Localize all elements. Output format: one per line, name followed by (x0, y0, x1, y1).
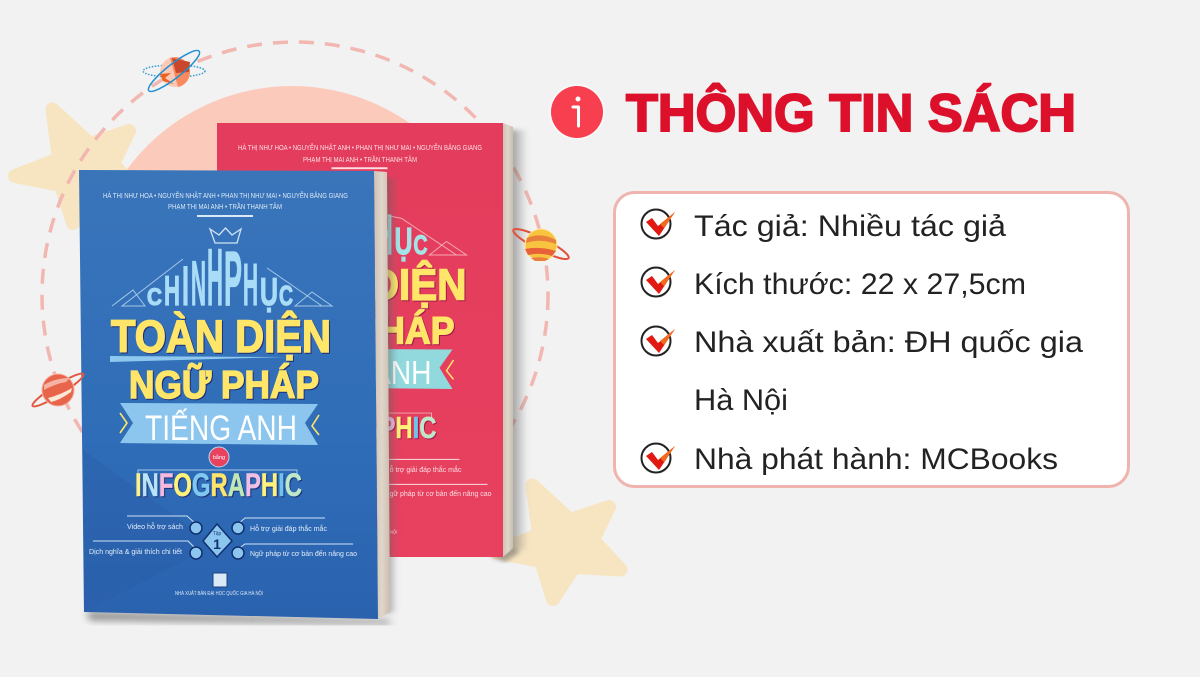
title: chinh phuc: H (207, 233, 223, 323)
row: publisher: Hà Nội (694, 384, 788, 417)
red book cover art: TIẾNG ANH (280, 353, 432, 392)
title: chinh phuc (147, 233, 293, 323)
connector (138, 470, 297, 476)
stripe (110, 356, 285, 362)
mountain outline (112, 259, 332, 306)
red book shadow (510, 130, 528, 550)
red book cover art: H (378, 204, 393, 267)
title: chinh phuc: I (182, 254, 189, 317)
blue book authors: PHẠM THỊ MAI ANH • TRẦN THANH TÂM (168, 201, 282, 211)
ribbon chevrons (120, 413, 319, 435)
title: chinh phuc: Ụ (260, 271, 278, 314)
blue book cover (79, 170, 378, 619)
red book authors (238, 143, 482, 164)
feature list: Dịch nghĩa & giải thích chi tiết (89, 547, 183, 556)
volume badge: 1 (213, 536, 221, 552)
feature list (89, 516, 357, 559)
dashed orbit (42, 42, 548, 548)
row: size: Kích thước: 22 x 27,5cm (694, 268, 1026, 301)
title: infographic: INFOGRAPHIC (135, 467, 302, 503)
row: publisher: Nhà xuất bản: ĐH quốc gia (694, 326, 1083, 359)
blue book lower shading (83, 450, 215, 612)
red book cover art: TOÀN DIỆN (244, 260, 466, 309)
feature list: Video hỗ trợ sách (127, 522, 183, 531)
icon: info (549, 84, 605, 140)
blue book ground shadow (86, 612, 392, 624)
book: red volume (217, 123, 528, 562)
volume badge (203, 524, 232, 557)
red book cover art: Ụ (394, 221, 413, 263)
icon: crown (210, 228, 241, 243)
icon: planet left (30, 370, 86, 410)
title: chinh phuc: P (224, 236, 242, 322)
book: blue volume (79, 170, 398, 624)
blue book authors (103, 191, 348, 211)
row: author: Tác giả: Nhiều tác giả (694, 210, 1006, 243)
peach circle (87, 86, 497, 496)
feature list: Ngữ pháp từ cơ bản đến nâng cao (250, 549, 357, 558)
star right (495, 486, 620, 599)
red book cover art: NGỮ PHÁP (262, 309, 454, 353)
publisher logo (213, 573, 227, 587)
bang badge: bằng (213, 454, 225, 461)
row: publisher (642, 326, 1083, 417)
heading (549, 82, 1076, 143)
title: tieng anh: TIẾNG ANH (145, 408, 297, 448)
feature list: Hỗ trợ giải đáp thắc mắc (250, 524, 327, 533)
title: chinh phuc: H (243, 252, 258, 318)
title text: THÔNG TIN SÁCH (626, 82, 1076, 143)
red book spine (503, 123, 513, 557)
publisher name: NHÀ XUẤT BẢN ĐẠI HỌC QUỐC GIA HÀ NỘI (175, 590, 263, 597)
title: toan dien: TOÀN DIỆN (111, 311, 331, 362)
red book cover art: INFOGRAPHIC (270, 411, 436, 445)
red book ground shadow (490, 548, 520, 562)
volume badge: Tập (213, 531, 222, 537)
icon: planet top (143, 46, 205, 96)
title: ngu phap: NGỮ PHÁP (129, 363, 319, 407)
bang badge (209, 447, 229, 467)
red book authors: HÀ THỊ NHƯ HOA • NGUYỄN NHẬT ANH • PHAN THỊ NHƯ MAI • NGUYỄN BĂNG GIANG (238, 143, 482, 152)
title: chinh phuc: H (164, 267, 180, 314)
red book cover art: NHÀ XUẤT BẢN ĐẠI HỌC QUỐC GIA HÀ NỘI (310, 529, 398, 536)
title: chinh phuc: C (279, 280, 293, 311)
ribbon (120, 403, 318, 445)
blue book authors: HÀ THỊ NHƯ HOA • NGUYỄN NHẬT ANH • PHAN THỊ NHƯ MAI • NGUYỄN BĂNG GIANG (103, 191, 348, 200)
star left (15, 110, 140, 223)
icon: planet right (511, 225, 571, 263)
title: chinh phuc: C (147, 284, 162, 311)
red book cover art: Ngữ pháp từ cơ bản đến nâng cao (384, 489, 492, 498)
title: chinh phuc: N (191, 249, 206, 319)
red book cover art: C (414, 229, 428, 260)
panel: book info (614, 192, 1128, 486)
blue book side shadow (385, 178, 398, 613)
row: distributor: Nhà phát hành: MCBooks (694, 443, 1058, 476)
red book authors: PHẠM THỊ MAI ANH • TRẦN THANH TÂM (303, 154, 417, 164)
red book cover (217, 123, 503, 557)
red book cover art: Hỗ trợ giải đáp thắc mắc (384, 465, 462, 474)
card (614, 192, 1128, 486)
blue book spine (374, 171, 390, 619)
red book cover art (244, 167, 492, 536)
